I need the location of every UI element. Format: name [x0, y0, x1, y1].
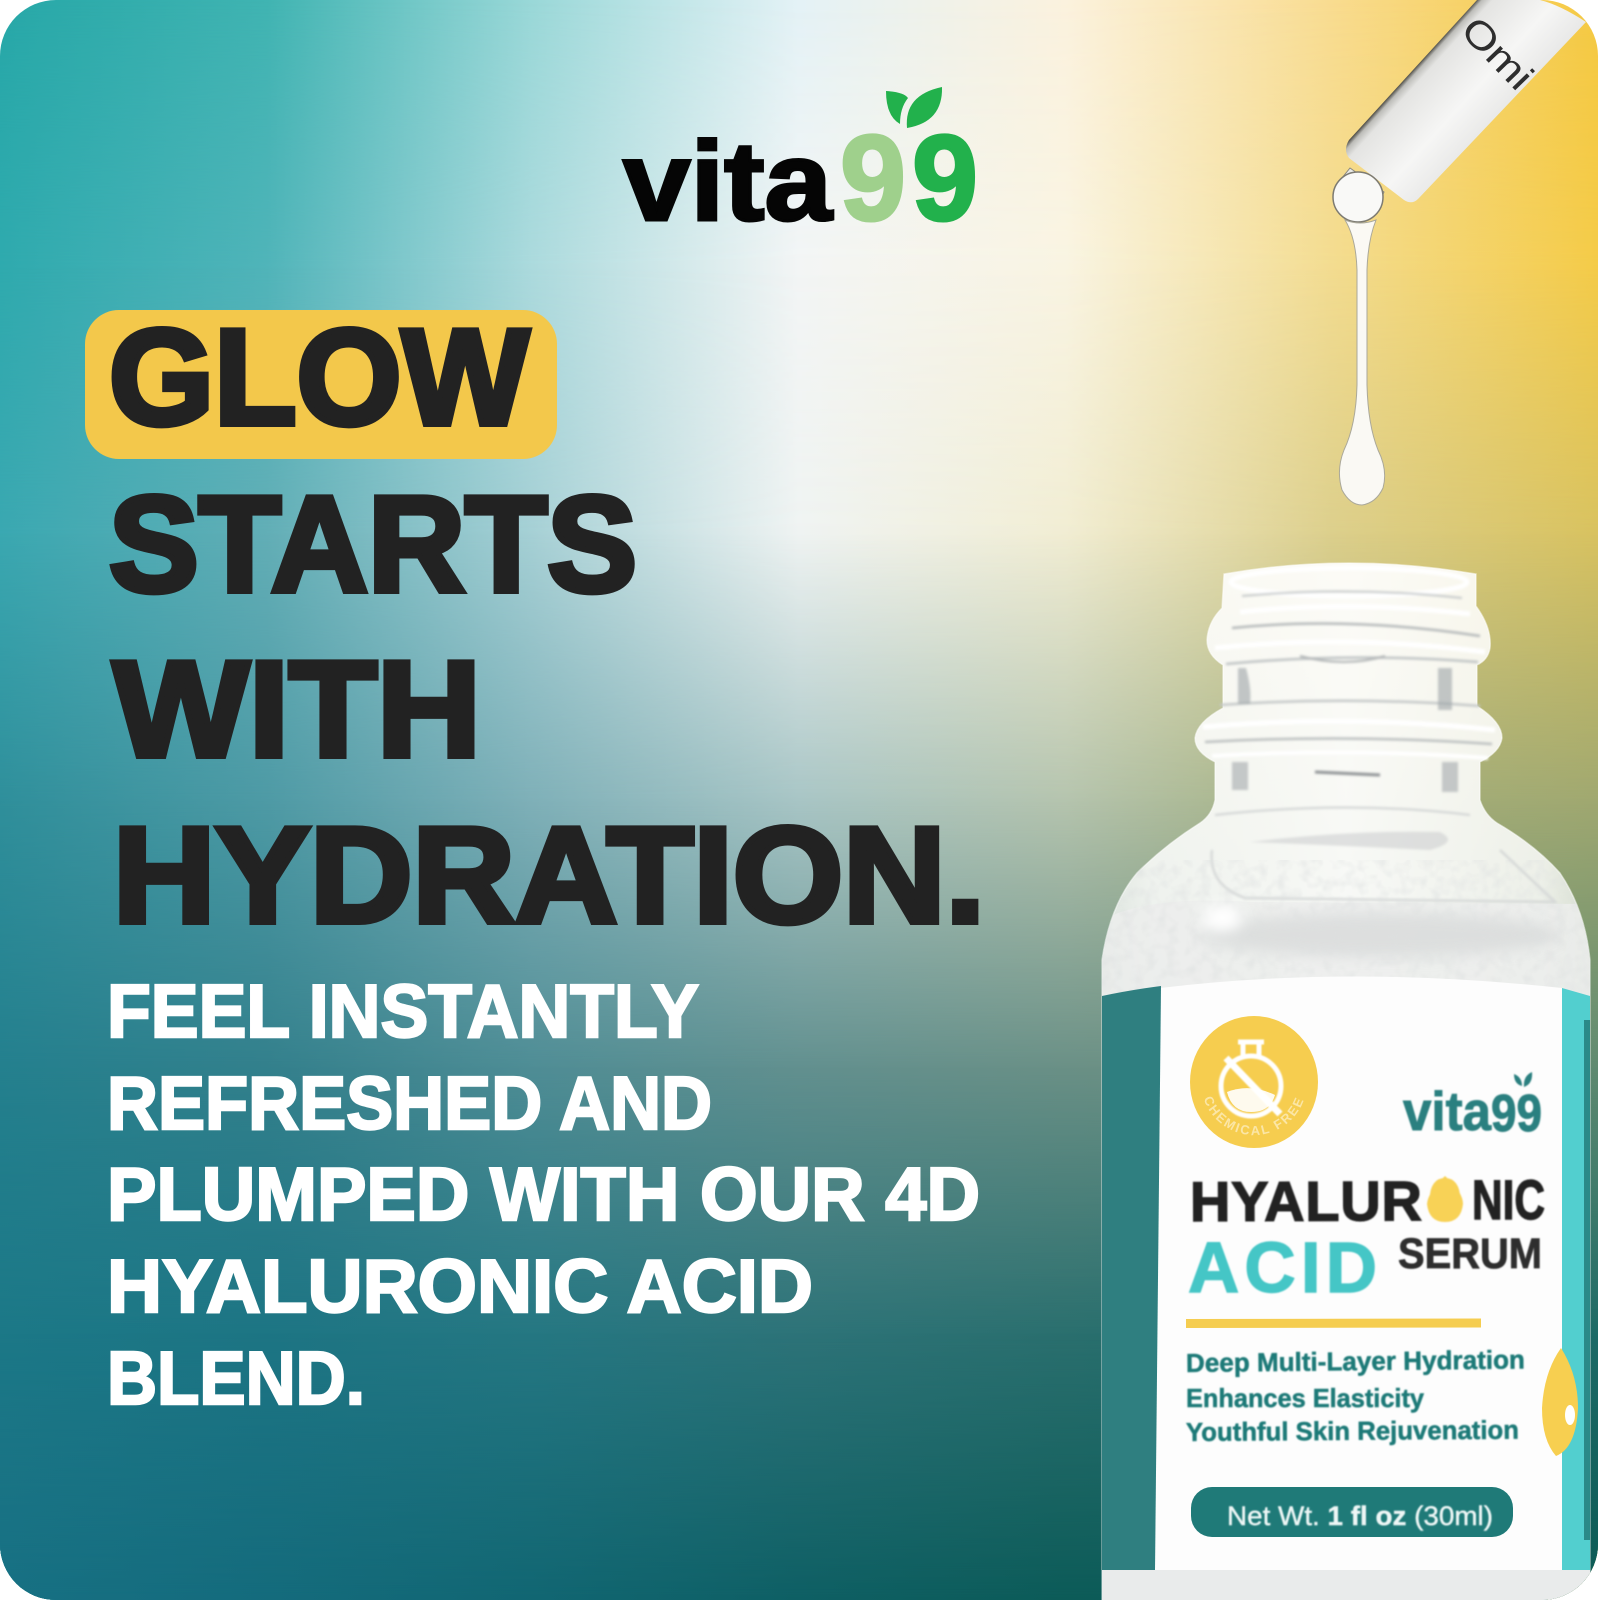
- subheading text: PLUMPED WITH OUR 4D: [107, 1152, 980, 1236]
- falling drop: [1339, 220, 1385, 505]
- headline: GLOW STARTS WITH HYDRATION.: WITH: [113, 633, 481, 785]
- frosted liquid band: [1102, 860, 1590, 1000]
- product name: ACID: [1188, 1229, 1377, 1308]
- label logo: [1402, 1071, 1542, 1134]
- subheading text: HYALURONIC ACID: [107, 1244, 813, 1328]
- label: [1102, 976, 1590, 1600]
- net weight pill: [1191, 1487, 1513, 1537]
- product name: HYALUR: [1190, 1169, 1422, 1233]
- bottle glass: [1102, 563, 1590, 1600]
- chemical free badge: [1190, 1016, 1318, 1148]
- label side droplet: [1542, 1348, 1578, 1456]
- headline: GLOW STARTS WITH HYDRATION.: GLOW: [109, 301, 530, 453]
- dropper glass tube: [1346, 0, 1586, 202]
- serum bottle: [1101, 562, 1591, 1600]
- dropper scale marking: Omi: [1453, 9, 1541, 99]
- dropper with serum drop: [1333, 0, 1586, 505]
- label white panel: [1155, 976, 1562, 1570]
- logo: vita99: [623, 87, 978, 246]
- net weight pill: Net Wt. 1 fl oz (30ml): [1227, 1501, 1493, 1531]
- label benefits list: Youthful Skin Rejuvenation: [1186, 1415, 1519, 1447]
- label benefits list: [1186, 1344, 1525, 1447]
- headline highlight pill: [85, 310, 557, 459]
- product name: [1188, 1175, 1546, 1294]
- label benefits list: Enhances Elasticity: [1186, 1383, 1425, 1413]
- label yellow divider: [1186, 1318, 1481, 1328]
- subheading text: BLEND.: [107, 1336, 365, 1420]
- product name: SERUM: [1398, 1230, 1542, 1278]
- label left teal band: [1102, 986, 1161, 1570]
- label logo: 99: [1491, 1085, 1542, 1143]
- subheading text: FEEL INSTANTLY: [107, 969, 699, 1053]
- bottom frost: [1102, 1570, 1590, 1600]
- subheading text: [107, 969, 980, 1420]
- headline: GLOW STARTS WITH HYDRATION.: STARTS: [109, 468, 637, 620]
- headline: GLOW STARTS WITH HYDRATION.: HYDRATION.: [113, 799, 985, 951]
- logo: vita99: 9: [840, 110, 906, 246]
- glass highlights: [1203, 568, 1555, 902]
- label benefits list: Deep Multi-Layer Hydration: [1186, 1344, 1525, 1378]
- product name: O: [1428, 1167, 1462, 1232]
- label logo: vita: [1403, 1080, 1491, 1142]
- headline: GLOW STARTS WITH HYDRATION.: [109, 301, 985, 951]
- label right turquoise band: [1562, 988, 1590, 1570]
- logo: vita99: vita: [623, 119, 833, 244]
- chemical free badge: CHEMICAL FREE: [1204, 1096, 1304, 1136]
- subheading text: REFRESHED AND: [107, 1061, 712, 1145]
- dropper tip: [1333, 168, 1384, 222]
- product name: NIC: [1472, 1168, 1545, 1231]
- logo: vita99: 9: [912, 110, 978, 246]
